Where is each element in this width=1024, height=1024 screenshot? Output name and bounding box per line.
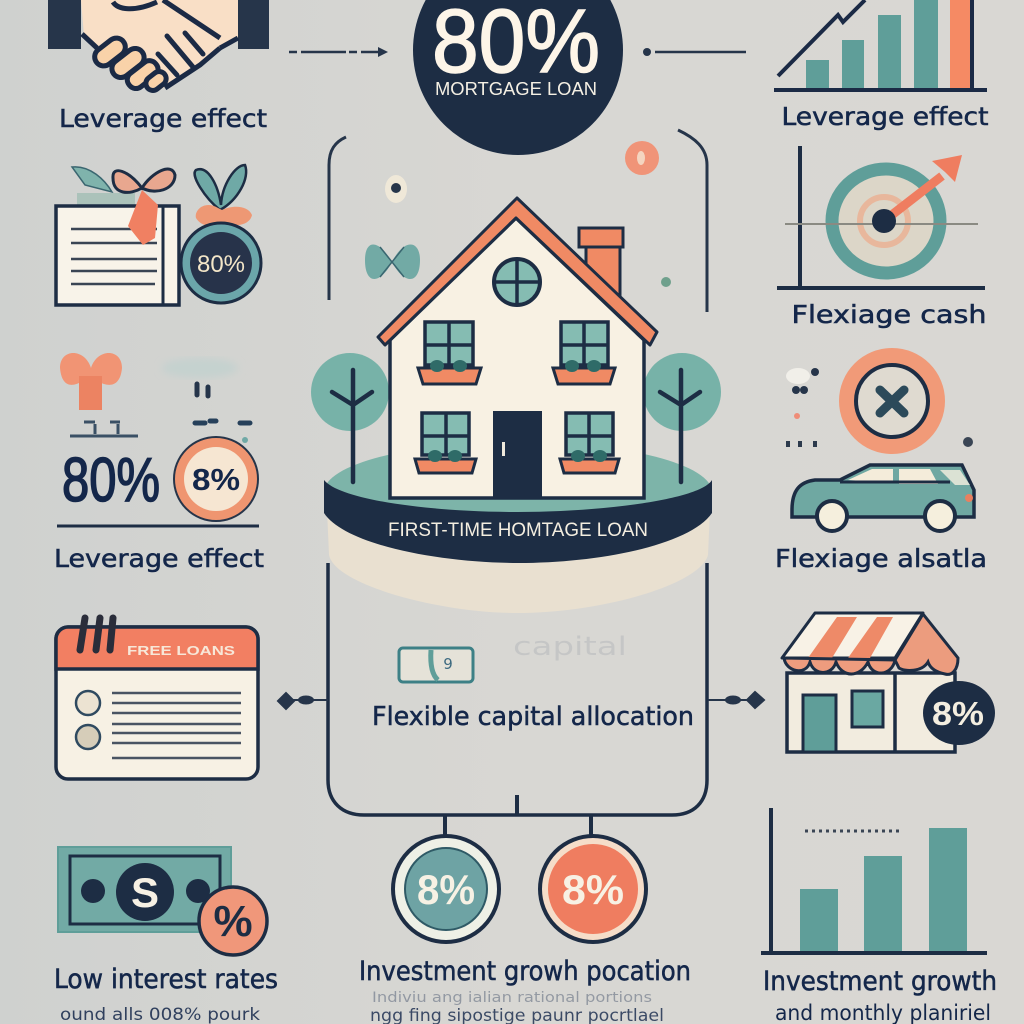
chimney [579,228,623,300]
badge: 8% coral ring: 8% [192,462,240,497]
badge: 80% mortgage loan: MORTGAGE LOAN [435,79,597,99]
door [493,411,542,498]
arrow: top right dashed [643,48,746,56]
tree trunks [332,370,700,482]
label: faded capital: capital [513,632,627,662]
flower boxes [415,368,619,473]
icon: loan card [56,618,258,779]
icon: banknote with percent: % [213,897,253,946]
label: investment growth pocation: Investment growh pocation [359,956,691,987]
icon: banknote with percent: S [131,869,159,916]
walls [390,218,644,498]
label: investment growth: Investment growth [763,966,997,997]
icon: bow medal 80% [181,165,261,303]
icon: small circles above house [365,141,671,287]
icon: bow medal 80%: 80% [197,251,245,278]
icon: small banknote [399,648,473,682]
badge: teal 8% [393,836,499,942]
trees [311,353,721,431]
badge: 80% mortgage loan [413,0,623,155]
label: flexiage cash: Flexiage cash [792,300,986,329]
icon: gift document [56,167,179,305]
arrow: top left dashed [289,47,388,57]
illustration: house on platform [311,198,721,613]
connectors: side dots [278,692,764,709]
plants [428,360,607,462]
label: low interest rates: Low interest rates [54,964,278,995]
bracket: upper around house [329,130,707,312]
icon: coral circle with x [786,348,973,454]
label: flexiage alsatla: Flexiage alsatla [775,544,987,573]
roof [378,198,657,345]
label: blurred text: Indiviu ang ialian rational portions [372,990,652,1006]
connectors: stems to badges [445,795,591,837]
round window [494,259,540,305]
platform [324,442,712,613]
icon: target with arrow [777,146,985,288]
badge: teal 8%: 8% [417,866,475,913]
chart: leverage bars [774,0,987,90]
label: leverage effect top left: Leverage effect [59,104,267,133]
platform: FIRST-TIME HOMTAGE LOAN [388,520,648,541]
icon: ribbon with marks [60,353,250,443]
connector: central frame [328,563,707,815]
label: flexible capital allocation: Flexible capital allocation [372,702,694,732]
badge: 8% coral ring [174,437,258,521]
icon: shop with awning [782,613,995,752]
badge: coral 8% [540,836,646,942]
chart: investment growth bars [761,808,987,953]
stat: 80%: 80% [62,446,160,515]
icon: car [792,465,974,531]
label: leverage effect top right: Leverage effect [782,102,989,131]
label: leverage effect left: Leverage effect [54,544,264,573]
windows [422,322,613,455]
icon: banknote with percent [58,847,267,955]
icon: small banknote: 9 [443,655,453,673]
icon: shop with awning: 8% [932,695,984,732]
badge: coral 8%: 8% [562,866,624,913]
icon: loan card: FREE LOANS [127,643,235,658]
icon: handshake [48,0,269,93]
